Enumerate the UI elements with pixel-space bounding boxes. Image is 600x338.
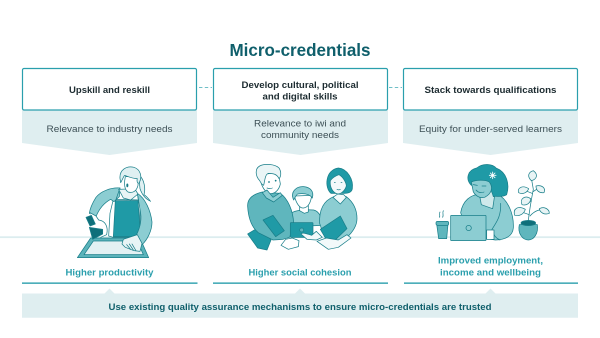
outcome: improved employment, income and wellbeing: [404, 256, 578, 284]
panel: stack towards qualifications: [403, 68, 578, 155]
outcome: higher social cohesion: Higher social cohesion: [248, 268, 352, 278]
relevance arrow panel 2: community needs: [261, 130, 339, 141]
pot: [519, 225, 538, 240]
relevance arrow panel 1: [22, 110, 197, 155]
icon: family with devices: [248, 164, 357, 250]
relevance arrow panel 2: Relevance to iwi and: [254, 118, 346, 130]
panel: cultural, political and digital skills: [213, 68, 388, 155]
heading box 2: Develop cultural, political: [242, 80, 358, 91]
heading box 1: [22, 68, 196, 110]
icon: worker at a table: [77, 167, 152, 258]
icon: learner at laptop with plant and cup: [436, 164, 549, 241]
title: Micro-credentials: [230, 40, 371, 60]
quality assurance band: Use existing quality assurance mechanisms to ensure micro-credentials are trusted: [108, 302, 492, 313]
outcome: higher productivity: Higher productivity: [66, 268, 154, 278]
quality assurance band: [22, 288, 578, 318]
heading box 1: Upskill and reskill: [69, 85, 150, 96]
tablet: [290, 223, 313, 237]
torso: [461, 193, 513, 240]
plant: [518, 178, 545, 225]
man: [248, 226, 271, 250]
panel: upskill and reskill: [22, 68, 197, 155]
relevance arrow panel 2: [213, 110, 388, 155]
child body: [292, 210, 322, 227]
baseline behind illustrations: [0, 236, 600, 238]
heading box 2: and digital skills: [262, 92, 338, 102]
heading box 2: [214, 68, 388, 110]
heading box 3: Stack towards qualifications: [424, 85, 556, 96]
outcome: improved employment, income and wellbeing: Improved employment,: [438, 256, 543, 266]
hair: [468, 164, 508, 197]
relevance arrow panel 3: [403, 110, 578, 155]
woman's book: [320, 216, 347, 245]
outcome: improved employment, income and wellbeing: income and wellbeing: [440, 268, 541, 278]
relevance arrow panel 3: Equity for under-served learners: [419, 124, 562, 135]
connectors between boxes: [199, 86, 402, 88]
cup: [437, 224, 448, 239]
woman: [320, 197, 357, 241]
relevance arrow panel 1: Relevance to industry needs: [46, 124, 173, 135]
heading box 3: [404, 68, 578, 110]
laptop: [487, 230, 494, 239]
